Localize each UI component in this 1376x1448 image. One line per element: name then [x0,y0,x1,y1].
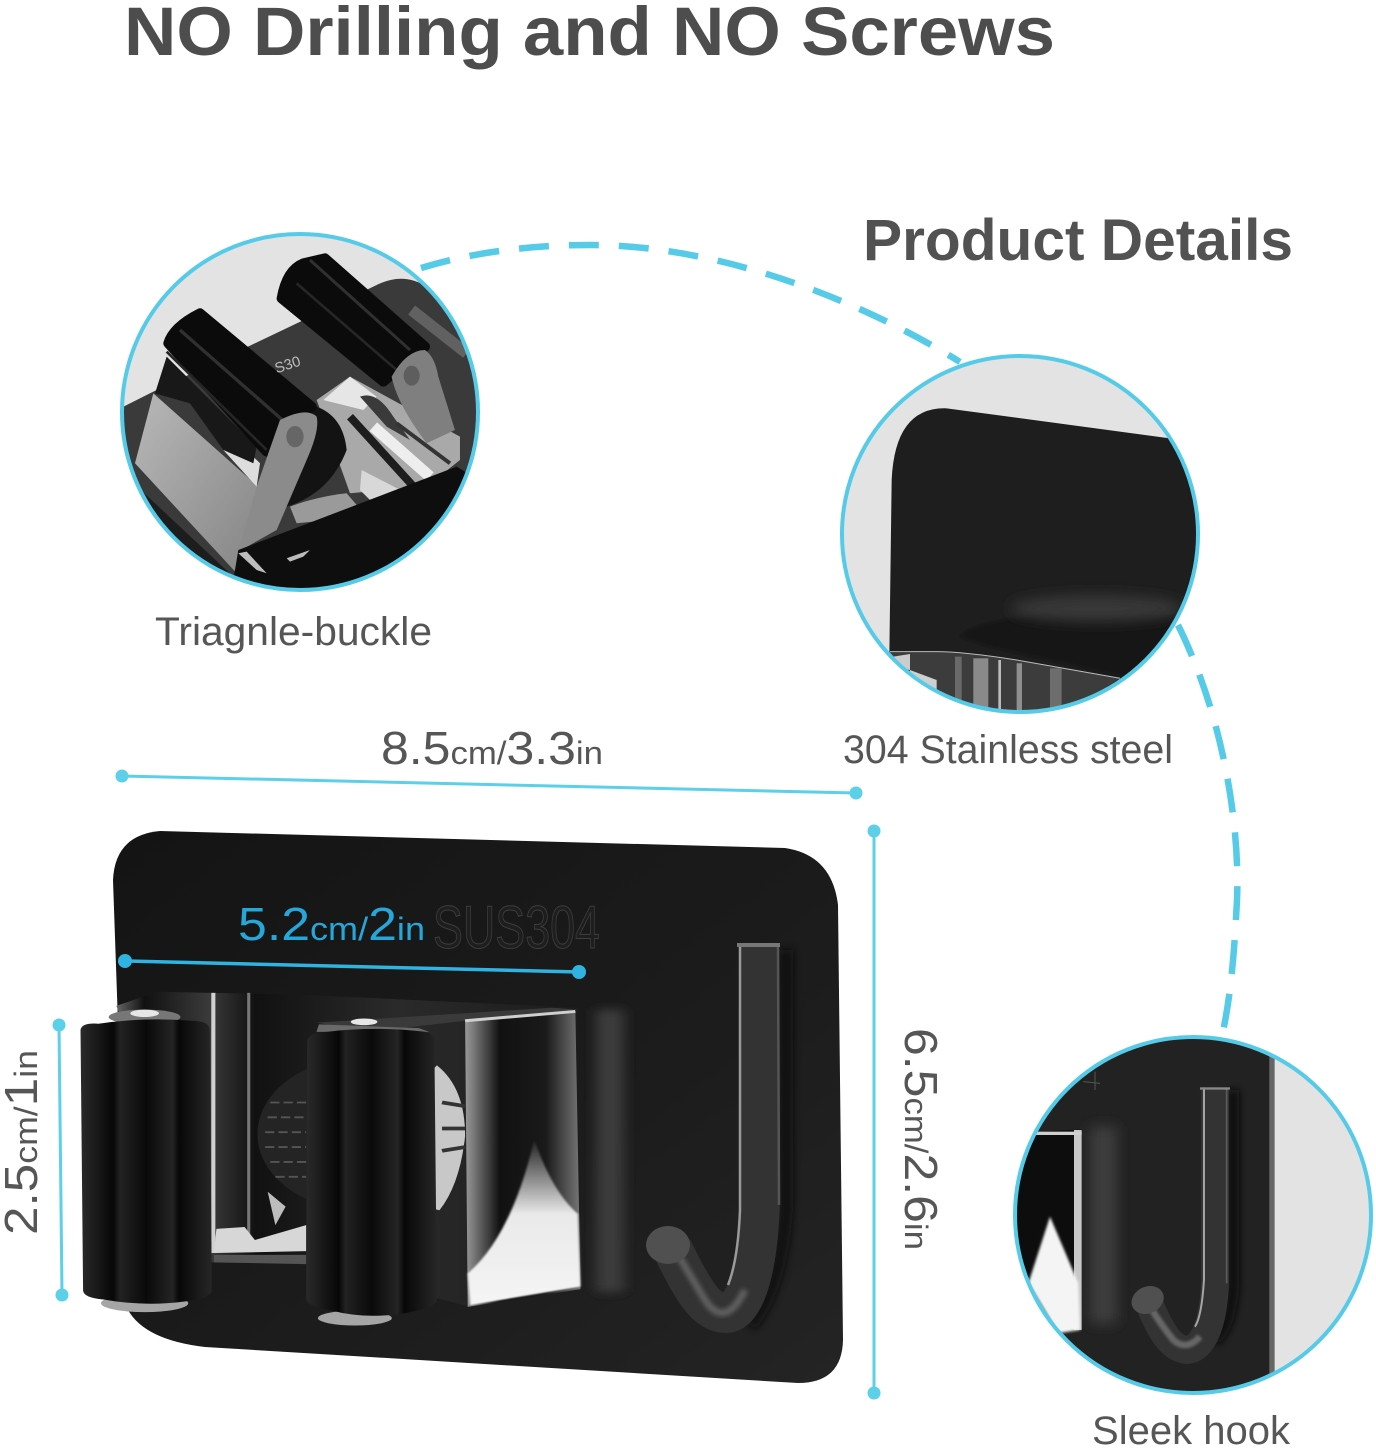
steel side wall [465,1011,580,1307]
mop clamp [81,992,624,1326]
heading: product details: Product Details [863,208,1293,273]
detail circle: sleek hook [1000,1030,1371,1400]
detail circle: stainless steel [842,356,1210,717]
textured disc [257,1058,463,1210]
right roller [318,1311,392,1326]
detail circle: triangle buckle: S30 [273,354,303,377]
dashed connector: stainless steel to sleek hook [1178,625,1237,1036]
height dimension label: 6.5 cm/ 2.6 in [895,1028,947,1250]
detail circle: triangle buckle [110,234,490,600]
left roller [101,1294,188,1312]
label: triangle buckle: Triagnle-buckle [155,610,432,654]
inner width dimension label: 5.2 cm/2in [238,898,425,950]
plate highlight [596,1010,624,1292]
inner width dimension line [118,954,586,979]
J hook [646,943,786,1325]
steel bracket back [116,992,580,1307]
dashed connector: triangle-buckle to stainless steel [421,245,960,362]
width dimension line [116,770,862,800]
roller height dimension line [52,1018,68,1302]
width dimension label: 8.5cm/3.3in [381,722,603,774]
height dimension line [868,824,880,1400]
embossed SUS304 mark: SUS304 [433,894,600,961]
label: 304 stainless steel: 304 Stainless steel [843,728,1173,772]
adhesive plate [113,831,843,1383]
product: mop holder with hook [81,831,843,1383]
